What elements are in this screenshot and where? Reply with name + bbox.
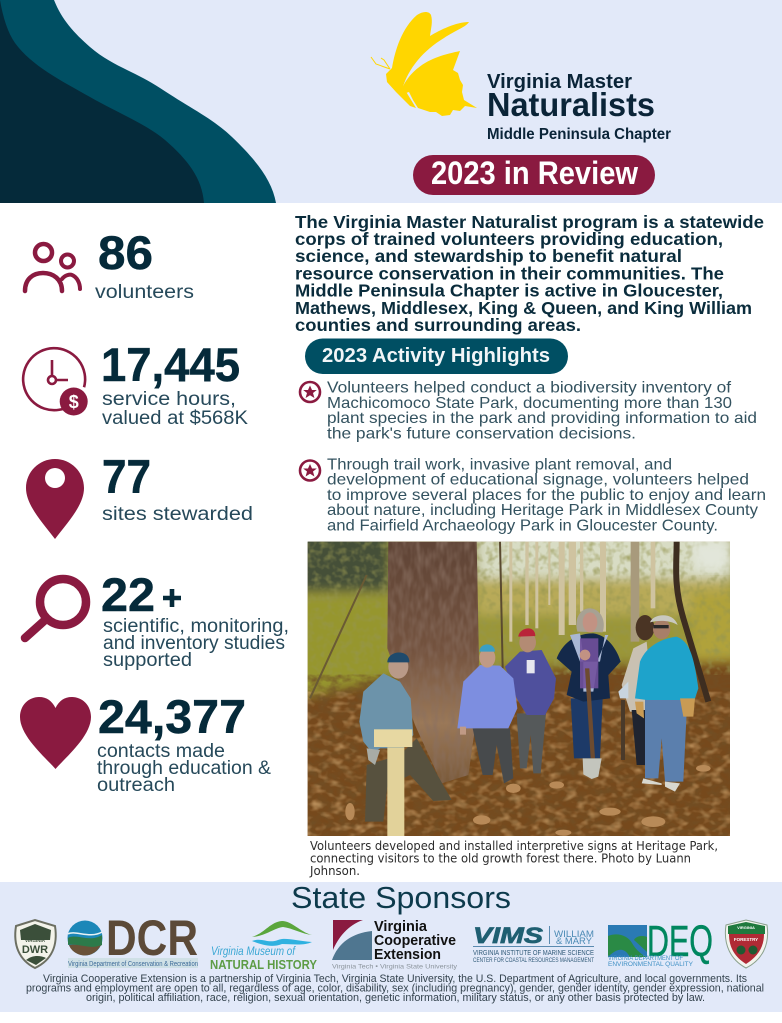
highlight 1 text: Volunteers helped conduct a biodiversity inventory of [327, 380, 732, 396]
stat: sites stewarded [26, 450, 253, 539]
intro paragraph: resource conservation in their communities. The [295, 264, 724, 284]
logo: Virginia Cooperative Extension [332, 919, 457, 970]
icon: heart [20, 697, 91, 769]
intro paragraph: science, and stewardship to benefit natural [295, 246, 682, 266]
logo: Virginia DEQ [608, 917, 713, 968]
highlight 1 text: the park's future conservation decisions. [327, 426, 636, 442]
intro paragraph: counties and surrounding areas. [295, 315, 581, 335]
logo: Virginia Cooperative Extension: Extension [374, 947, 441, 963]
highlight 2 text [327, 456, 766, 534]
logo: Virginia Museum of Natural History [210, 921, 318, 972]
panel: state sponsors [0, 880, 782, 1012]
intro paragraph: Mathews, Middlesex, King & Queen, and King William [295, 298, 752, 318]
label: service hours: service hours, [102, 389, 236, 410]
label: contacts line 3: outreach [97, 775, 175, 796]
logo: VIMS William & Mary: VIMS [473, 923, 543, 948]
person in navy coat with shovel [557, 608, 621, 779]
logo: Virginia DWR: VIRGINIA [25, 938, 46, 943]
logo: DCR: Virginia Department of Conservation & Recreation [68, 961, 198, 968]
photo caption: connecting visitors to the old growth forest there. Photo by Luann [310, 850, 691, 866]
logo: Virginia Department of Forestry: FORESTRY [734, 937, 758, 942]
label: studies line 1: scientific, monitoring, [103, 616, 289, 637]
stat: volunteers [25, 226, 194, 303]
logo text: Virginia Master: Virginia Master [487, 71, 632, 93]
highlight 1 text: plant species in the park and providing information to aid [327, 410, 757, 427]
logo: Virginia Cooperative Extension: Cooperative [374, 933, 456, 949]
photo caption [309, 838, 718, 878]
logo: Virginia DEQ: DEQ [647, 917, 713, 966]
logo: DCR [68, 910, 198, 968]
person behind [618, 615, 654, 765]
logo: Virginia Department of Forestry: VIRGINIA [737, 925, 755, 930]
person in purple jacket [505, 628, 556, 773]
highlight 2 text: and Fairfield Archaeology Park in Gloucester County. [327, 518, 718, 534]
footer disclaimer: programs and employment are open to all, regardless of age, color, disability, sex (including pregnancy), gender, gender identity, gender expression, national [26, 982, 764, 994]
heading: State Sponsors: State Sponsors [291, 880, 511, 915]
logo: VIMS William & Mary: & MARY [556, 936, 593, 947]
label: studies line 3: supported [103, 650, 192, 671]
heading pill: 2023 Activity Highlights [305, 338, 568, 374]
logo: Virginia DEQ: ENVIRONMENTAL QUALITY [608, 962, 693, 968]
icon: star badge [300, 382, 320, 402]
person in teal jacket [635, 615, 698, 792]
highlight 2 text: Through trail work, invasive plant removal, and [327, 456, 672, 474]
icon: map pin [26, 459, 84, 539]
icon: clock with dollar [12, 337, 96, 421]
fallen leaves [345, 765, 711, 836]
logo: Virginia DWR [15, 920, 56, 968]
label: contacts line 1: contacts made [97, 741, 225, 762]
teal wave [0, 0, 276, 203]
number: 17,445: 17,445 [101, 338, 240, 391]
stat: studies [25, 568, 289, 671]
logo: Virginia DEQ: VIRGINIA DEPARTMENT OF [608, 956, 683, 962]
highlight 2 [300, 456, 766, 534]
label: value: valued at $568K [102, 408, 248, 429]
icon: star badge [300, 460, 320, 480]
label: contacts line 2: through education & [97, 758, 271, 779]
logo: Virginia Museum of Natural History: NATURAL HISTORY [210, 958, 318, 972]
stat: service hours [12, 337, 248, 429]
label: studies line 2: and inventory studies [103, 633, 285, 654]
logo: VIMS William & Mary: WILLIAM [554, 929, 594, 940]
intro paragraph: corps of trained volunteers providing education, [295, 229, 723, 249]
logo: Virginia DWR: DWR [22, 944, 48, 956]
logo text: Middle Peninsula Chapter: Middle Peninsula Chapter [487, 126, 671, 143]
label: volunteers: volunteers [95, 282, 194, 303]
number: 22+: 22 [101, 568, 155, 621]
person in periwinkle jacket [457, 644, 517, 783]
logo: Virginia Department of Forestry [725, 920, 768, 968]
number: 22+ [101, 568, 181, 621]
intro paragraph: Middle Peninsula Chapter is active in Gloucester, [295, 280, 723, 300]
badge: 2023 in Review: 2023 in Review [431, 155, 638, 191]
header band [0, 0, 782, 203]
highlight 1 text: Machicomoco State Park, documenting more than 130 [327, 395, 732, 412]
intro paragraph [295, 212, 764, 335]
highlight 1 text [327, 380, 757, 442]
logo: VIMS William & Mary [473, 923, 594, 964]
label: sites stewarded: sites stewarded [102, 504, 253, 525]
highlight 2 text: development of educational signage, volunteers helped [327, 472, 749, 488]
logo: Virginia Cooperative Extension: Virginia Tech • Virginia State University [332, 964, 457, 970]
logo: Virginia Museum of Natural History: Virginia Museum of [211, 944, 296, 958]
dark navy wave [0, 0, 204, 203]
highlight 2 text: about nature, including Heritage Park in Middlesex County [327, 502, 758, 519]
highlight 1 [300, 380, 757, 442]
man in blue hoodie [359, 652, 452, 822]
stat: contacts [20, 690, 271, 796]
footer disclaimer: origin, political affiliation, race, religion, sexual orientation, genetic information, military status, or any other basis protected by law. [86, 992, 705, 1004]
number: 86: 86 [98, 226, 153, 279]
photo: volunteers at Heritage Park [308, 542, 730, 836]
number: 24,377: 24,377 [98, 690, 246, 743]
logo: VIMS William & Mary: VIRGINIA INSTITUTE OF MARINE SCIENCE [473, 950, 594, 957]
photo caption: Johnson. [309, 863, 360, 878]
heading pill: 2023 Activity Highlights: 2023 Activity Highlights [322, 345, 550, 367]
wooden sign [374, 729, 412, 836]
icon: magnifying glass [25, 579, 86, 638]
logo: DCR: DCR [106, 910, 198, 966]
highlight 2 text: to improve several places for the public to enjoy and learn [327, 487, 766, 504]
logo: VIMS William & Mary: CENTER FOR COASTAL RESOURCES MANAGEMENT [473, 958, 594, 964]
logo text: Naturalists: Naturalists [487, 86, 655, 123]
icon: people [25, 244, 80, 291]
number: 77: 77 [102, 450, 151, 503]
icon: clock with dollar: $ [69, 392, 79, 412]
logo: yellow butterfly [371, 12, 477, 116]
footer disclaimer: Virginia Cooperative Extension is a partnership of Virginia Tech, Virginia State University, the U.S. Department of Agriculture, and local governments. Its [43, 973, 748, 985]
footer disclaimer [26, 973, 764, 1004]
intro paragraph: The Virginia Master Naturalist program is a statewide [295, 212, 764, 232]
logo: Virginia Cooperative Extension: Virginia [374, 919, 428, 935]
photo caption: Volunteers developed and installed interpretive signs at Heritage Park, [310, 838, 718, 853]
